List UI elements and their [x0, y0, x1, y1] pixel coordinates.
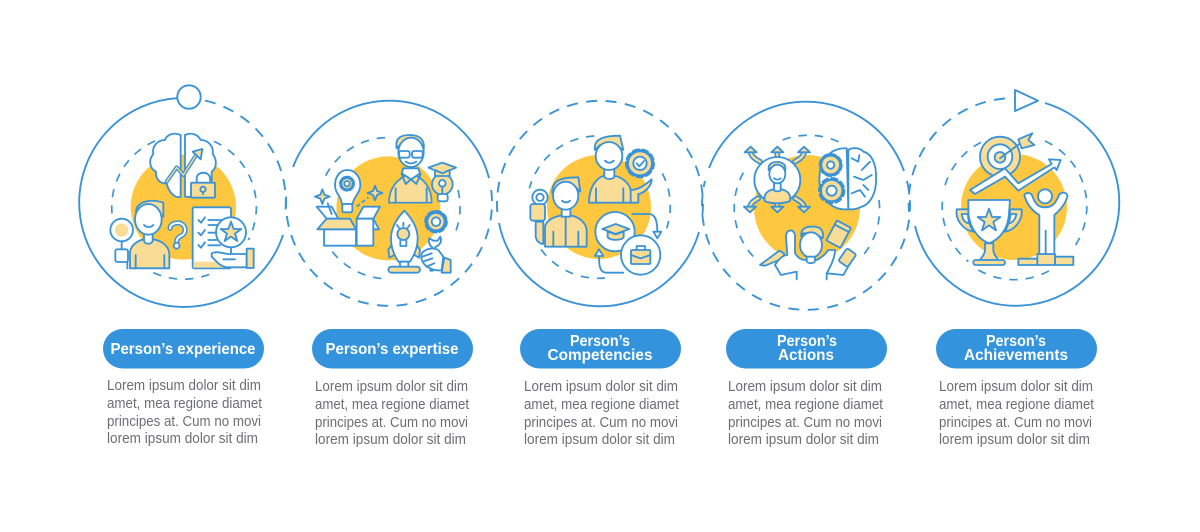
- label pill: person's actions: Person’s: [777, 333, 837, 350]
- text block: experience description: [107, 378, 262, 447]
- label pill: person's experience: [103, 329, 264, 368]
- text block: competencies description: Lorem ipsum dolor sit dim: [524, 379, 678, 395]
- text block: experience description: amet, mea regione diamet: [107, 396, 262, 412]
- outer ring: [497, 101, 703, 306]
- text block: expertise description: [315, 379, 469, 448]
- panel: person's actions: [702, 102, 910, 448]
- label pill: person's competencies: Competencies: [548, 347, 652, 364]
- text block: experience description: lorem ipsum dolor sit dim: [107, 431, 258, 447]
- label pill: person's experience: Person’s experience: [110, 341, 256, 358]
- text block: expertise description: principes at. Cum no movi: [315, 415, 468, 431]
- text block: competencies description: [524, 379, 679, 448]
- panel: person's achievements: [909, 90, 1119, 448]
- text block: achievements description: lorem ipsum dolor sit dim: [939, 432, 1090, 448]
- label pill: person's competencies: Person’s: [570, 333, 630, 350]
- text block: expertise description: amet, mea regione diamet: [315, 397, 469, 413]
- icon: actions illustration: [734, 135, 880, 279]
- outer ring: [702, 102, 910, 310]
- label pill: person's competencies: [520, 329, 681, 368]
- text block: actions description: amet, mea regione diamet: [728, 397, 883, 413]
- icon: experience illustration: [110, 134, 256, 279]
- text block: achievements description: Lorem ipsum dolor sit dim: [939, 379, 1093, 395]
- outer ring with start marker: [79, 85, 286, 307]
- label pill: person's expertise: [312, 329, 473, 368]
- icon: expertise illustration: [315, 135, 460, 279]
- text block: competencies description: amet, mea regione diamet: [524, 397, 679, 413]
- text block: expertise description: Lorem ipsum dolor sit dim: [315, 379, 468, 395]
- text block: actions description: Lorem ipsum dolor sit dim: [728, 379, 882, 395]
- text block: actions description: principes at. Cum no movi: [728, 415, 882, 431]
- text block: competencies description: principes at. Cum no movi: [524, 415, 678, 431]
- label pill: person's achievements: [936, 329, 1097, 368]
- text block: expertise description: lorem ipsum dolor sit dim: [315, 432, 466, 448]
- icon: competencies illustration: [529, 136, 670, 278]
- text block: actions description: [728, 379, 883, 448]
- label pill: person's actions: [726, 329, 887, 368]
- text block: actions description: lorem ipsum dolor sit dim: [728, 432, 879, 448]
- label pill: person's actions: Actions: [778, 347, 834, 364]
- label pill: person's expertise: Person’s expertise: [326, 341, 459, 358]
- label pill: person's achievements: Achievements: [964, 347, 1068, 364]
- panel: person's competencies: [497, 101, 703, 448]
- text block: achievements description: principes at. Cum no movi: [939, 415, 1092, 431]
- panel: person's experience: [79, 85, 286, 447]
- text block: achievements description: amet, mea regione diamet: [939, 397, 1094, 413]
- outer ring with end arrow: [909, 90, 1119, 306]
- text block: competencies description: lorem ipsum dolor sit dim: [524, 432, 675, 448]
- outer ring: [286, 101, 492, 306]
- text block: experience description: principes at. Cum no movi: [107, 414, 261, 430]
- text block: experience description: Lorem ipsum dolor sit dim: [107, 378, 261, 394]
- icon: achievements illustration: [942, 133, 1087, 280]
- text block: achievements description: [939, 379, 1094, 448]
- label pill: person's achievements: Person’s: [986, 333, 1046, 350]
- panel: person's expertise: [286, 101, 492, 448]
